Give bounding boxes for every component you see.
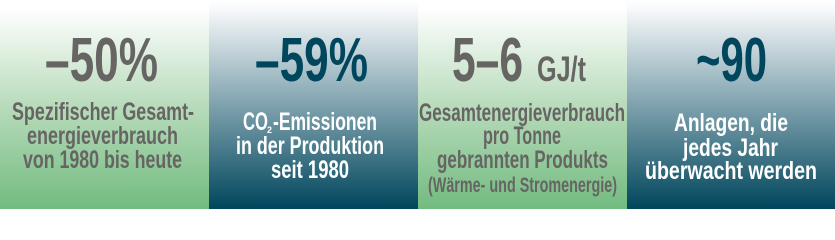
panel: monitored plants (627, 0, 835, 209)
description: CO2 emissions (236, 108, 384, 184)
description: monitored plants: jedes Jahr (682, 134, 778, 162)
panel: total energy per tonne (418, 0, 627, 209)
description: CO2 emissions: CO (243, 108, 268, 136)
description: monitored plants: Anlagen, die (674, 109, 788, 137)
figure: ~90: ~90 (696, 26, 767, 95)
figure: 5-6 GJ/t: 5–6 (452, 26, 523, 95)
description: CO2 emissions: in der Produktion (236, 132, 384, 160)
description: specific energy: energieverbrauch (27, 122, 178, 150)
figure: -50%: –50% (45, 26, 158, 95)
description: monitored plants (645, 109, 817, 185)
description: specific energy: von 1980 bis heute (23, 146, 182, 174)
panel: CO2 emissions (209, 0, 418, 209)
figure: -59%: –59% (255, 26, 368, 95)
description: total energy: (Wärme- und Stromenergie) (428, 174, 617, 197)
description: total energy (419, 99, 625, 197)
panel: specific energy consumption (0, 0, 209, 209)
figure: 5-6 GJ/t: GJ/t (537, 50, 586, 89)
description: total energy: gebrannten Produkts (437, 146, 608, 174)
description: specific energy (12, 98, 194, 174)
description: CO2 emissions: 2 (267, 125, 272, 135)
description: CO2 emissions: seit 1980 (271, 156, 349, 184)
description: specific energy: Spezifischer Gesamt- (12, 98, 194, 126)
description: CO2 emissions: -Emissionen (273, 108, 377, 136)
description: total energy: pro Tonne (483, 122, 561, 150)
description: total energy: Gesamtenergieverbrauch (419, 99, 625, 127)
